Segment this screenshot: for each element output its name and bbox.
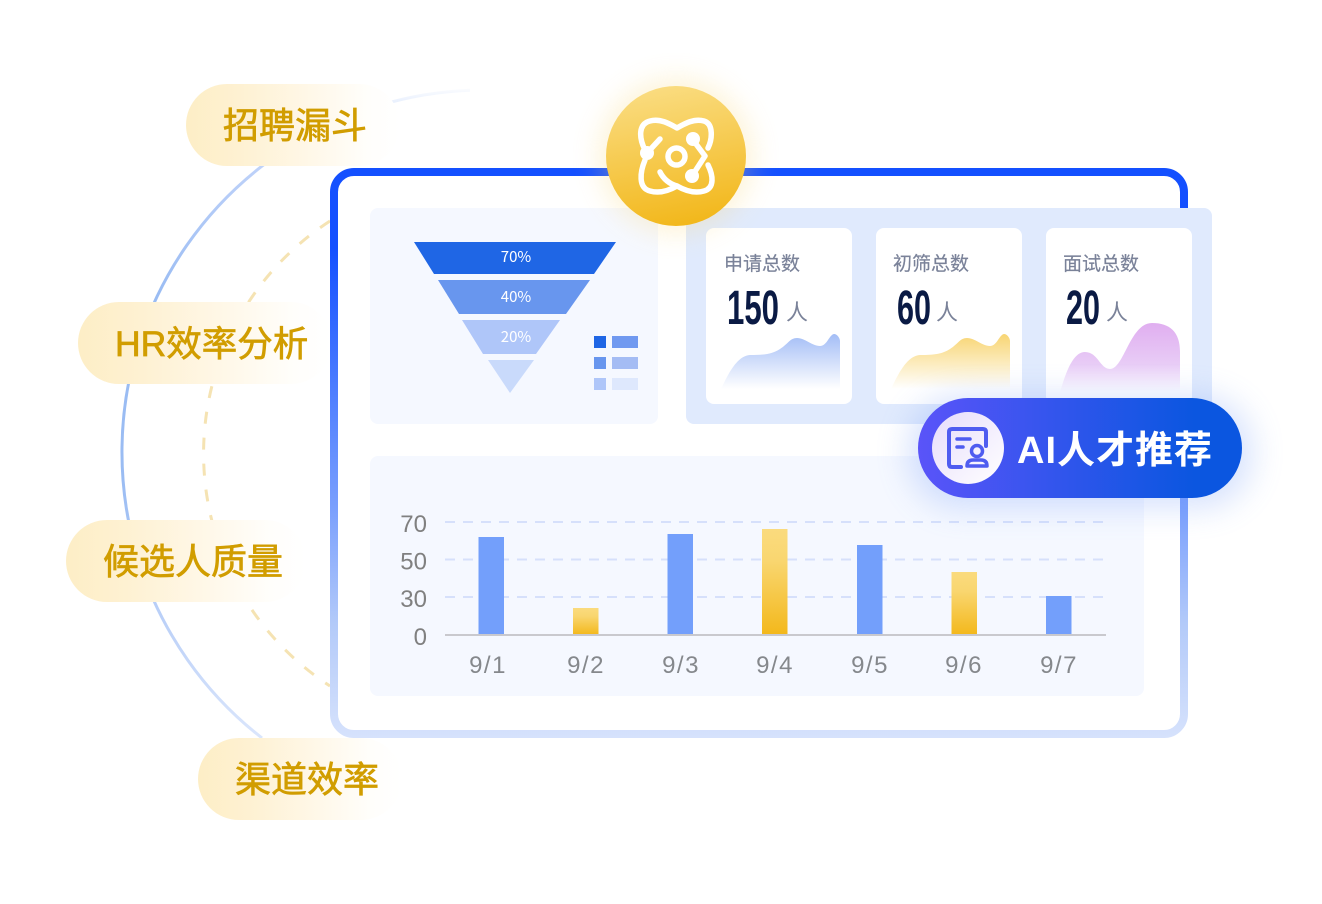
card: 初筛总数 xyxy=(876,228,1022,404)
y axis labels: 70 xyxy=(400,511,427,538)
y axis labels xyxy=(400,511,427,651)
dashed gold inner arc xyxy=(204,221,330,686)
card: 申请总数: 150 xyxy=(727,282,779,335)
card: 面试总数: 20 xyxy=(1066,282,1100,335)
badge: AI人才推荐: AI人才推荐 xyxy=(1017,430,1213,472)
funnel layer 20% xyxy=(462,320,560,354)
card: 面试总数 xyxy=(1046,228,1192,404)
tag: 招聘漏斗: 招聘漏斗 xyxy=(223,105,367,146)
x axis labels: 9/6 xyxy=(945,652,983,679)
funnel layer 70% xyxy=(414,242,616,274)
dashboard frame xyxy=(334,172,1184,734)
funnel layer 20%: 20% xyxy=(501,326,531,347)
card: 初筛总数: 人 xyxy=(936,300,958,325)
tag: 招聘漏斗 xyxy=(186,84,400,166)
panel: funnel xyxy=(370,208,658,424)
x axis labels: 9/7 xyxy=(1040,652,1078,679)
x axis labels: 9/2 xyxy=(567,652,605,679)
card: 申请总数 xyxy=(706,228,852,404)
card: 面试总数: 人 xyxy=(1106,300,1128,325)
funnel layer 40% xyxy=(438,280,590,314)
tag: 渠道效率 xyxy=(198,738,402,820)
tag: 候选人质量: 候选人质量 xyxy=(103,541,283,582)
glow behind AI badge xyxy=(908,396,1252,508)
icon: candidate profile xyxy=(932,412,1004,484)
card: 申请总数: 人 xyxy=(786,300,808,325)
blue outer arc xyxy=(122,90,470,738)
bars xyxy=(478,529,1072,635)
tag: 候选人质量 xyxy=(66,520,306,602)
panel: bar chart xyxy=(370,456,1144,696)
badge: AI人才推荐 xyxy=(918,398,1242,498)
card: 初筛总数: 初筛总数 xyxy=(893,253,969,275)
tag: HR效率分析 xyxy=(78,302,332,384)
x axis labels: 9/5 xyxy=(851,652,889,679)
x axis labels: 9/3 xyxy=(662,652,700,679)
icon: AI atom badge xyxy=(606,86,746,226)
x axis xyxy=(445,634,1106,636)
card: 初筛总数: 60 xyxy=(897,282,931,335)
card: 面试总数: 面试总数 xyxy=(1063,253,1139,275)
panel: stats xyxy=(686,208,1212,424)
y axis labels: 0 xyxy=(414,624,427,651)
glow behind AI atom icon xyxy=(600,80,752,232)
card: 申请总数: 申请总数 xyxy=(724,253,800,275)
y axis labels: 30 xyxy=(400,586,427,613)
funnel legend xyxy=(594,336,638,390)
tag: HR效率分析: HR效率分析 xyxy=(115,324,308,364)
x axis labels xyxy=(469,652,1078,679)
funnel tip xyxy=(488,360,534,393)
grid lines xyxy=(445,522,1104,597)
funnel layer 70%: 70% xyxy=(501,246,531,267)
y axis labels: 50 xyxy=(400,548,427,576)
x axis labels: 9/1 xyxy=(469,652,507,679)
x axis labels: 9/4 xyxy=(756,652,794,679)
funnel layer 40%: 40% xyxy=(501,286,531,307)
tag: 渠道效率: 渠道效率 xyxy=(235,759,379,800)
